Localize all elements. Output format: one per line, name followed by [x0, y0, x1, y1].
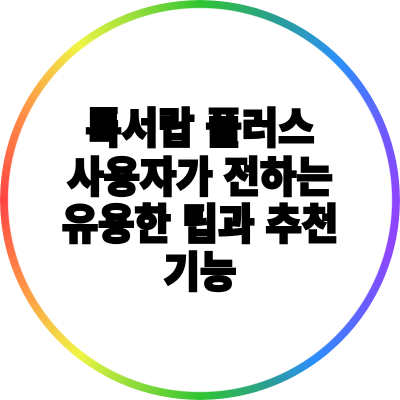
title: 사용자가 전하는: [67, 154, 333, 201]
title: 톡서랍 플러스: [85, 106, 314, 152]
title: 기능: [164, 250, 236, 296]
title: 유용한 팁과 추천: [62, 202, 338, 248]
